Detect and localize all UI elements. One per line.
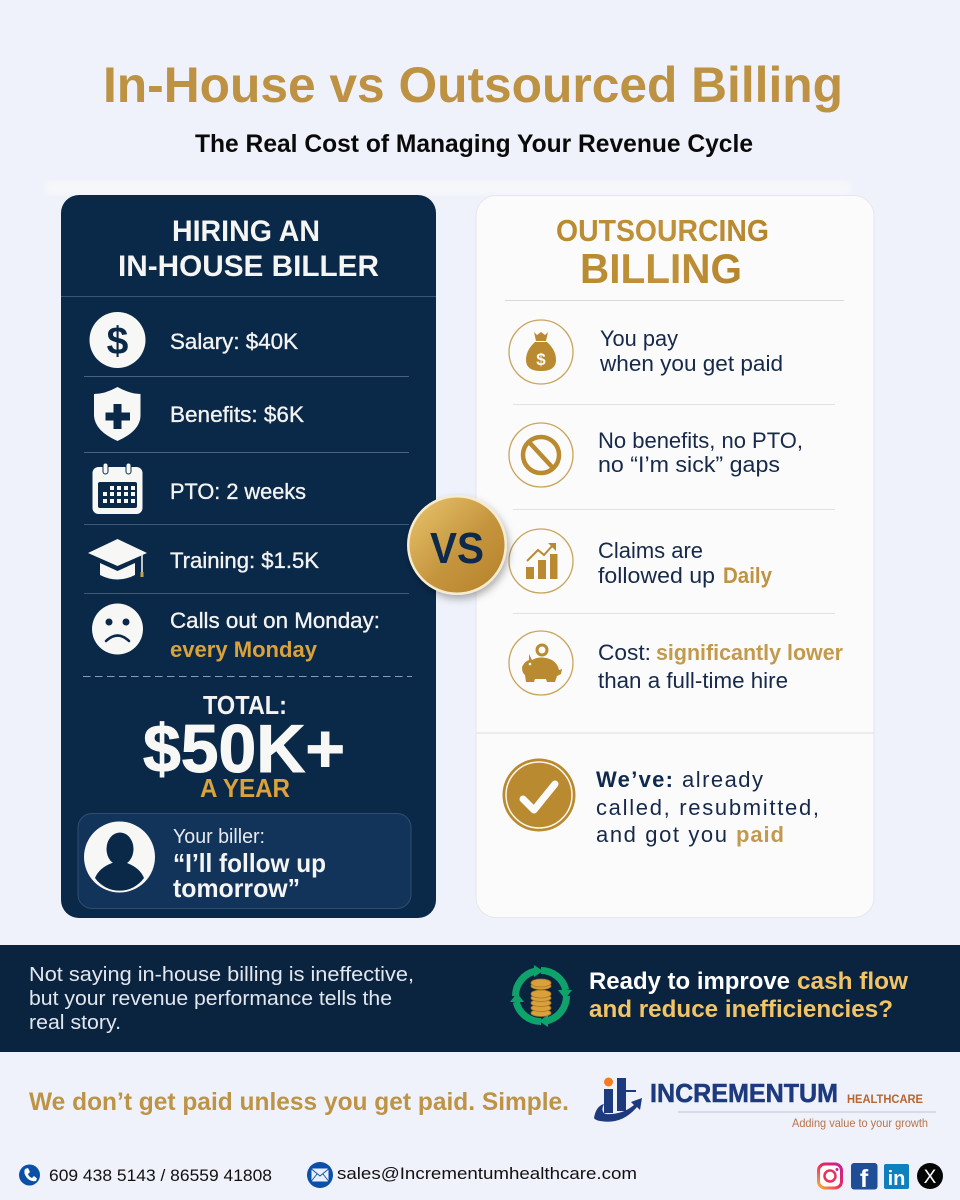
panel heading: outsourcing: BILLING [580, 245, 742, 292]
banner message [29, 964, 414, 1034]
icon: facebook: f [860, 1165, 869, 1193]
icon: shield [94, 387, 140, 441]
total cost: A YEAR [200, 773, 290, 803]
subtitle: The Real Cost of Managing Your Revenue Cycle [195, 130, 753, 158]
icon: no symbol [509, 423, 573, 487]
icon: envelope [307, 1162, 333, 1188]
icon: piggy bank [509, 631, 573, 695]
icon: x: X [924, 1167, 937, 1188]
icon: graduation cap [88, 539, 147, 580]
logo: incrementum healthcare: HEALTHCARE [847, 1092, 923, 1106]
item: we've already: We’ve: [596, 767, 673, 792]
logo: incrementum healthcare [594, 1078, 936, 1130]
banner message: but your revenue performance tells the [29, 988, 392, 1010]
row: pto: PTO: 2 weeks [170, 479, 306, 504]
item: you pay: when you get paid [599, 351, 783, 376]
vs badge: VS [430, 524, 484, 573]
item: no benefits: No benefits, no PTO, [598, 428, 803, 453]
logo: incrementum healthcare: INCREMENTUM [650, 1078, 838, 1108]
icon: calendar [92, 463, 142, 514]
item: we've already: called, resubmitted, [596, 795, 819, 820]
total cost: TOTAL: [203, 690, 287, 720]
contact: phone: 609 438 5143 / 86559 41808 [49, 1166, 272, 1185]
icon: sad face [92, 604, 143, 654]
icon: instagram [818, 1164, 842, 1188]
icon: coins with cycle arrows [510, 965, 572, 1027]
icon: dollar coin [90, 312, 146, 368]
contact: email: sales@Incrementumhealthcare.com [337, 1164, 637, 1183]
contact: email [307, 1162, 637, 1188]
banner: call to action [0, 945, 960, 1052]
item: claims followed up: Claims are [598, 538, 703, 563]
logo: incrementum healthcare: Adding value to your growth [792, 1116, 928, 1130]
icon: dollar coin: $ [107, 320, 129, 363]
item: cost: than a full-time hire [598, 668, 788, 693]
row: benefits: Benefits: $6K [170, 402, 304, 427]
icon: logo mark [594, 1078, 642, 1122]
item: claims followed up: followed up [598, 563, 715, 588]
social icons [818, 1163, 943, 1193]
callout: your biller: tomorrow” [173, 873, 300, 903]
callout: your biller: Your biller: [173, 826, 265, 848]
total cost [143, 690, 345, 803]
icon: money bag [509, 320, 573, 384]
row: salary: Salary: $40K [170, 329, 298, 354]
banner message: Not saying in-house billing is ineffective, [29, 964, 414, 986]
panel heading: outsourcing: OUTSOURCING [556, 213, 769, 248]
panel heading: in-house: IN-HOUSE BILLER [118, 250, 379, 283]
banner question: and reduce inefficiencies? [589, 996, 893, 1023]
item: no benefits: no “I’m sick” gaps [598, 452, 780, 477]
total cost: $50K+ [143, 711, 345, 787]
icon: avatar [84, 822, 155, 892]
icon: check badge [502, 758, 576, 832]
item: you pay: You pay [600, 326, 678, 351]
vs badge [407, 495, 507, 595]
banner message: real story. [29, 1012, 121, 1034]
icon: phone [19, 1164, 40, 1186]
title: In-House vs Outsourced Billing [103, 57, 843, 113]
icon: growth chart [509, 529, 573, 593]
row: calls out on monday [170, 608, 380, 662]
panel: outsourcing billing [476, 196, 874, 918]
row: calls out on monday: every Monday [170, 637, 318, 662]
item: no benefits [598, 428, 803, 477]
item: we've already [596, 767, 819, 847]
item: we've already: already [682, 767, 763, 792]
item: cost [598, 640, 843, 693]
item: cost: Cost: [598, 640, 651, 665]
item: claims followed up: Daily [723, 563, 773, 588]
row: training: Training: $1.5K [170, 548, 319, 573]
banner question: cash flow [797, 968, 908, 995]
panel heading: in-house: HIRING AN [172, 215, 320, 248]
callout: your biller: “I’ll follow up [173, 848, 326, 878]
panel heading: outsourcing [556, 213, 769, 292]
panel heading: in-house [118, 215, 379, 283]
tagline: We don’t get paid unless you get paid. Simple. [29, 1088, 569, 1116]
banner question: Ready to improve [589, 968, 790, 995]
item: we've already: paid [736, 822, 784, 847]
panel: hiring an in-house biller [61, 195, 436, 918]
callout: your biller [78, 814, 411, 908]
item: claims followed up [598, 538, 773, 588]
icon: money bag: $ [536, 350, 546, 369]
item: cost: significantly lower [656, 640, 843, 665]
item: we've already: and got you [596, 822, 727, 847]
item: you pay [599, 326, 783, 376]
icon: linkedin: in [888, 1168, 905, 1190]
row: calls out on monday: Calls out on Monday: [170, 608, 380, 633]
banner question [589, 968, 908, 1023]
